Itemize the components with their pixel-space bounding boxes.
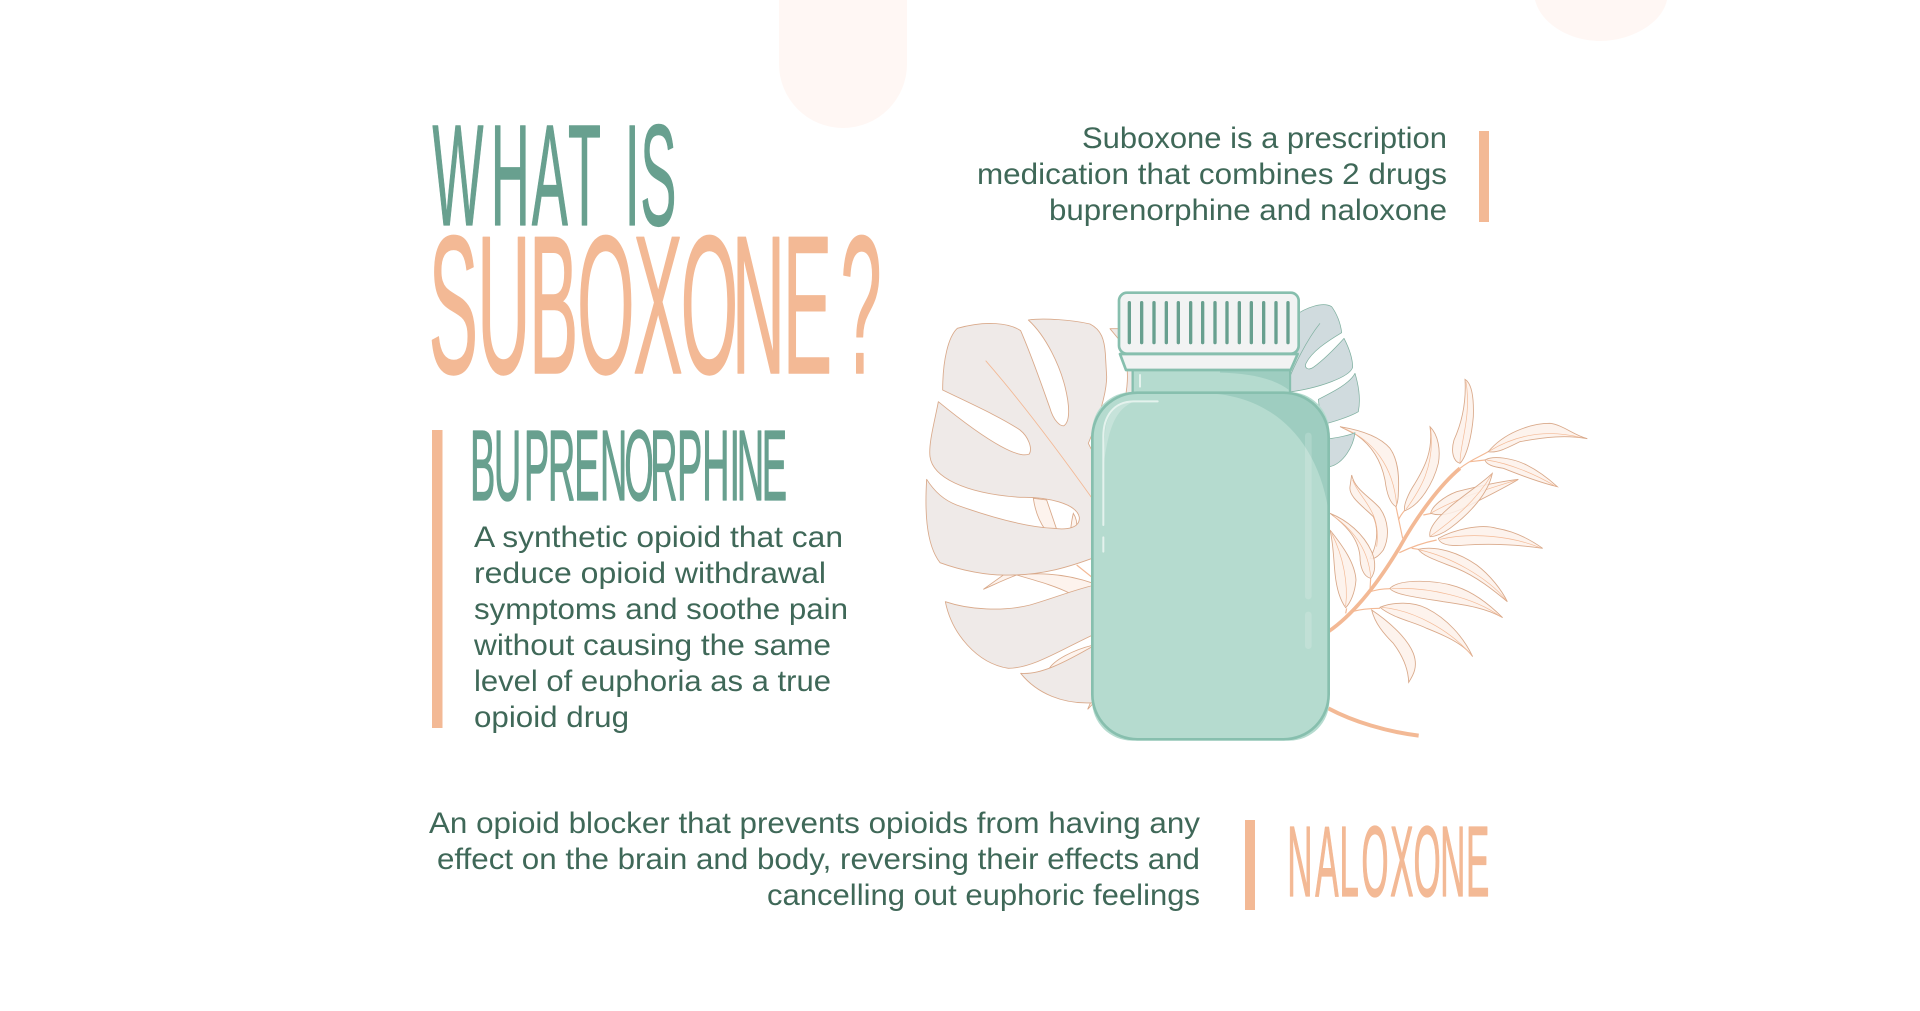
bottle neck xyxy=(1133,369,1290,393)
description: without causing the same xyxy=(473,629,831,662)
description: opioid drug xyxy=(474,701,629,734)
heading: buprenorphine: BUPRENORPHINE xyxy=(470,411,787,522)
accent bar xyxy=(1245,820,1255,910)
intro accent bar xyxy=(1479,131,1489,222)
panel: naloxone xyxy=(429,805,1489,917)
title xyxy=(429,97,882,415)
bottle cap xyxy=(1119,293,1299,370)
icon: monstera leaf xyxy=(926,319,1135,703)
intro copy line 2: medication that combines 2 drugs xyxy=(977,158,1447,191)
description xyxy=(429,807,1200,912)
icon: leaves behind monstera xyxy=(983,498,1093,709)
description: symptoms and soothe pain xyxy=(474,593,848,626)
intro copy: Suboxone is a prescription xyxy=(1082,122,1447,155)
heading: naloxone: NALOXONE xyxy=(1287,805,1489,917)
description: A synthetic opioid that can xyxy=(474,521,843,554)
panel: buprenorphine xyxy=(432,411,848,734)
description: level of euphoria as a true xyxy=(474,665,831,698)
bottle body xyxy=(1092,392,1329,741)
description: An opioid blocker that prevents opioids from having any xyxy=(429,807,1200,840)
icon: medicine bottle xyxy=(1092,293,1329,741)
background blob: right pill xyxy=(1535,0,1667,41)
intro text block xyxy=(977,122,1489,227)
illustration: bottle and plants xyxy=(926,293,1587,741)
icon: blue leaf xyxy=(1283,305,1359,467)
title line: suboxone: SUBOXONE? xyxy=(429,194,882,415)
icon: eucalyptus branch right xyxy=(1328,379,1587,736)
background blob: left pill xyxy=(779,0,907,128)
description: effect on the brain and body, reversing their effects and xyxy=(437,843,1200,876)
description: cancelling out euphoric feelings xyxy=(767,879,1200,912)
title line: what is: WHAT IS xyxy=(432,97,676,257)
description: reduce opioid withdrawal xyxy=(474,557,826,590)
intro copy line 3: buprenorphine and naloxone xyxy=(1049,194,1447,227)
accent bar xyxy=(432,430,442,728)
description xyxy=(473,521,848,734)
